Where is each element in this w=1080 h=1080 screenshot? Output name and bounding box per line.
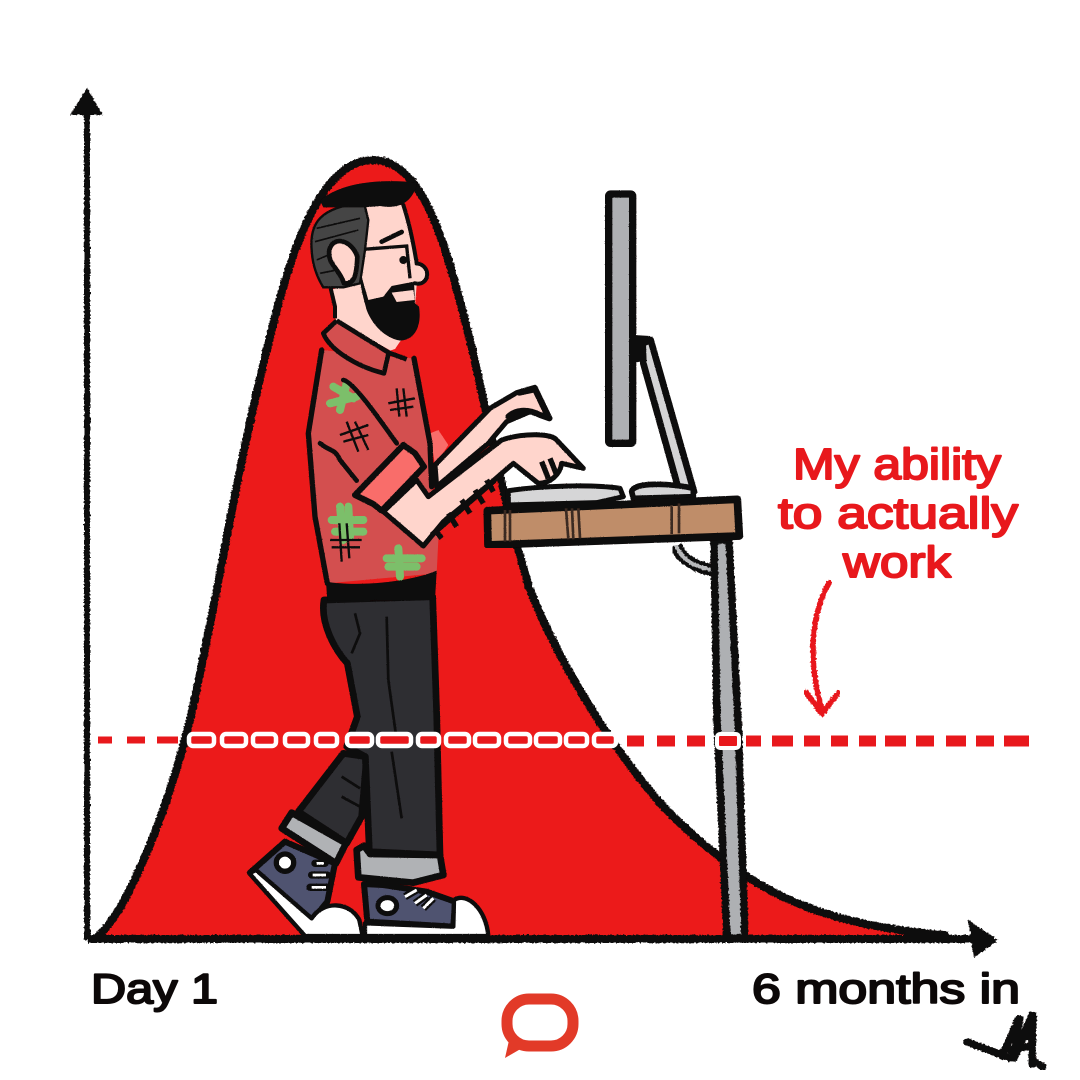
neck outline (331, 288, 335, 318)
top hair (320, 181, 417, 207)
front forearm and hand (383, 435, 583, 546)
front shoe eyelet and laces (378, 890, 433, 914)
x axis label: 6 months in: 6 months in (752, 965, 1020, 1012)
logo: speech bubble (505, 999, 573, 1058)
back arm and hand (435, 387, 550, 487)
label: my ability to actually work: work (842, 538, 952, 587)
dashes on white right (627, 736, 1029, 746)
label: my ability to actually work: My ability (793, 440, 1001, 489)
back cuff (282, 813, 346, 863)
front trouser leg (323, 597, 440, 855)
sleeve outlines (320, 380, 397, 481)
ear (329, 241, 357, 283)
outlined dashes over the red area (189, 734, 616, 746)
shirt pattern black hatches (330, 388, 415, 562)
back sleeve peek (430, 430, 448, 465)
front shoe (364, 884, 455, 927)
rolled sleeve cuff (355, 445, 424, 511)
back trouser leg (298, 753, 367, 843)
hair streaks (315, 218, 360, 273)
glasses and eye (364, 232, 410, 278)
label: my ability to actually work: to actually (778, 489, 1018, 538)
trouser creases (342, 613, 402, 818)
neck and face (330, 205, 427, 352)
arm hair and finger lines (432, 458, 557, 538)
arrow pointing to threshold line (806, 583, 838, 714)
beard (360, 273, 420, 341)
label: my ability to actually work (778, 440, 1018, 587)
desk with keyboard (487, 486, 739, 545)
back shoe (250, 842, 335, 921)
back hand fingers (508, 389, 549, 418)
shirt body (308, 350, 438, 583)
dashed threshold line (98, 734, 1029, 748)
dashes on white left (98, 736, 178, 744)
y axis with arrowhead (70, 88, 103, 940)
area under curve (96, 160, 935, 938)
person: torso, head and arms (308, 181, 583, 601)
monitor and stand (609, 194, 694, 498)
x axis with arrowhead (88, 920, 998, 958)
back shoe toe (249, 870, 363, 936)
front shoe toe (365, 898, 488, 936)
mouth (392, 290, 415, 302)
desk leg (676, 540, 745, 938)
curve outline (96, 160, 945, 938)
x axis label: day 1: Day 1 (91, 965, 218, 1012)
front cuff (357, 846, 443, 883)
person: legs and shoes (249, 597, 488, 936)
back shoe eyelet and laces (276, 854, 327, 887)
shirt side outlines (308, 350, 432, 583)
shirt pattern green (330, 383, 422, 577)
collar (323, 321, 407, 373)
dash over the desk leg (717, 734, 739, 748)
side hair (311, 203, 368, 287)
belt (326, 571, 437, 601)
face profile (403, 205, 427, 284)
artist signature (967, 1013, 1043, 1067)
